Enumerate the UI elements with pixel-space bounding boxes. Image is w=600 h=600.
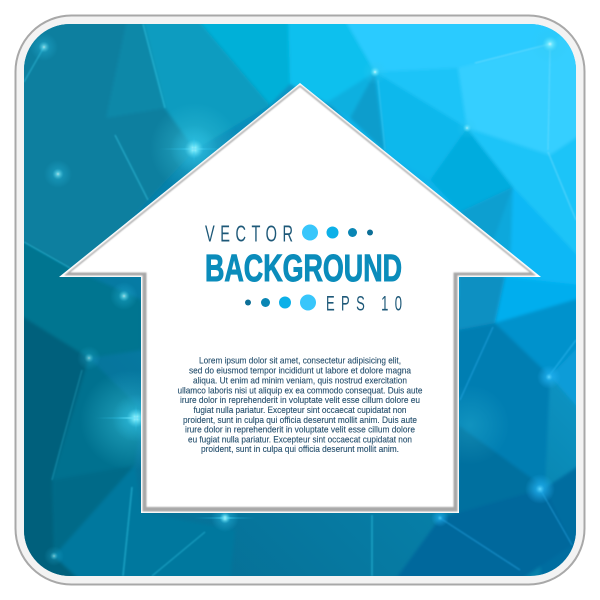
body text block: proident, sunt in culpa qui officia deserunt mollit anim. [201, 444, 399, 454]
house shape panel [59, 83, 541, 513]
dots: top row [302, 224, 373, 240]
body text block: irure dolor in reprehenderit in voluptate velit esse cillum dolore [185, 425, 415, 435]
body text block: Lorem ipsum dolor sit amet, consectetur adipisicing elit, [199, 356, 401, 366]
heading: vector: VECTOR [205, 221, 293, 248]
body text block: ullamco laboris nisi ut aliquip ex ea commodo consequat. Duis aute [178, 385, 422, 395]
body text block: aliqua. Ut enim ad minim veniam, quis nostrud exercitation [193, 375, 407, 385]
body text block: sed do eiusmod tempor incididunt ut labore et dolore magna [189, 366, 411, 376]
body text block: eu fugiat nulla pariatur. Excepteur sint occaecat cupidatat non [188, 434, 412, 444]
body text block: irure dolor in reprehenderit in voluptate velit esse cillum dolore eu [180, 395, 420, 405]
light haze [80, 103, 510, 470]
body text block: fugiat nulla pariatur. Excepteur sint occaecat cupidatat non [194, 405, 406, 415]
heading: background: BACKGROUND [205, 248, 402, 290]
body text block: proident, sunt in culpa qui officia deserunt mollit anim. Duis aute [183, 415, 417, 425]
label: eps 10: EPS 10 [326, 291, 402, 315]
body text block [178, 356, 422, 454]
dots: bottom row [245, 294, 316, 310]
